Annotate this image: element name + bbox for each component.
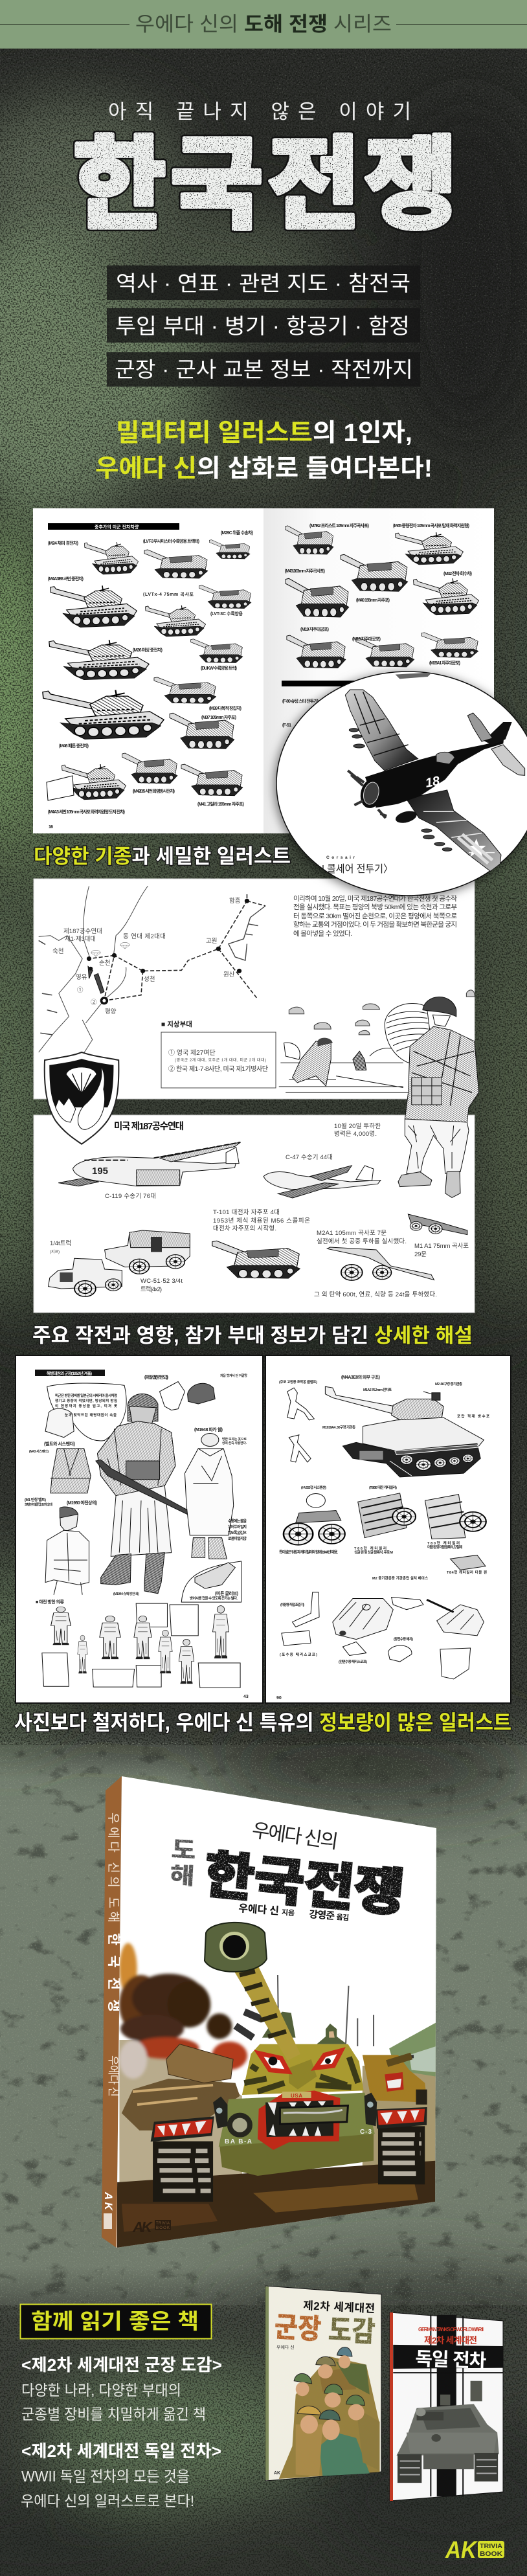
- tank page labels: (포수용 페리스코프): [280, 1652, 317, 1657]
- cover titles: 한국전쟁: [201, 1846, 407, 1922]
- left page vehicle drawings: 중추가의 미군 전차차량: [95, 524, 139, 530]
- right page labels: (M19 자주대공포): [300, 626, 329, 632]
- tank page labels: [276, 1374, 489, 1700]
- left page labels: (M26 퍼싱 중전차): [133, 647, 163, 653]
- main title: 한국전쟁: [73, 129, 458, 242]
- vehicle and gun labels: C-119 수송기 76대: [105, 1193, 156, 1200]
- magnifier: Corsair fighter: [276, 672, 527, 896]
- left page labels: (M29C 위즐 수송차): [221, 530, 253, 536]
- small clothing figures: [51, 1606, 229, 1684]
- right page labels: (M16 자주대공포): [352, 636, 381, 642]
- uniform page labels: 방어시를 접을 수 있도록 끈기는 벌다.: [190, 1596, 238, 1601]
- map parachute icons: [91, 942, 129, 956]
- tank page labels: (전면수용 페리스코프): [339, 1659, 367, 1664]
- spine: 한국전쟁: [106, 1933, 121, 2012]
- operation description text: 전을 실시했다. 목표는 평양의 북방 50km에 있는 숙천과 그로부: [293, 903, 457, 911]
- fin and tailplanes: [484, 722, 512, 745]
- distant tank: [363, 2055, 427, 2103]
- tank page labels: T66형 캐터필러: [354, 1546, 387, 1551]
- headline: [95, 420, 432, 482]
- book 1 title text: [273, 2299, 376, 2476]
- right page labels: (M15A1 자주대공포): [429, 660, 460, 666]
- recommended books heading: [21, 2304, 211, 2339]
- tank page labels: M2 .50구경 중기관총: [435, 1381, 462, 1386]
- torso: [405, 1026, 479, 1122]
- iron cross bands: [393, 2314, 503, 2496]
- book 2 title text: [415, 2327, 487, 2372]
- panel: operation units, lower part: [34, 1115, 475, 1313]
- uniform page labels: 이 현장까지 동상을 입고, 미처 못: [55, 1403, 117, 1408]
- operation description text: 터 동쪽으로 30km 떨어진 순천으로, 이곳은 평양에서 북쪽으로: [293, 912, 457, 920]
- map place labels: ①: [77, 987, 84, 994]
- vehicle and gun labels: 1/4t트럭: [50, 1239, 71, 1247]
- headlights: [213, 2096, 227, 2129]
- Corsair caption: [317, 855, 393, 875]
- map: [39, 886, 265, 1053]
- section bar: 해병대원의 군장(1950년 겨울): [47, 1370, 92, 1376]
- vehicle and gun labels: M1 A1 75mm 곡사포: [414, 1243, 469, 1250]
- howitzers: [327, 1214, 467, 1280]
- tank page labels: 더블 핀 및 더블 블록식, 강철제: [427, 1544, 462, 1550]
- uniform page labels: (M43 서스펜더): [29, 1449, 49, 1454]
- icon: 187th regiment shield: [45, 1052, 118, 1144]
- helmet and face: [423, 997, 456, 1026]
- right page vehicle drawings: [282, 526, 478, 686]
- main title: 한국전쟁: [73, 129, 458, 242]
- drop tank: [396, 811, 417, 823]
- right page labels: (M7B2 프리스트 105mm 자주곡사포): [309, 523, 369, 528]
- book 2 title text: 제2차 세계대전: [424, 2335, 477, 2345]
- left page labels: (M46 패튼 중전차): [59, 743, 89, 749]
- uniform page labels: 넣어 두어 얼지: [228, 1524, 247, 1530]
- parachute bundle: [385, 1003, 432, 1063]
- cover titles: 도: [171, 1837, 197, 1864]
- recommended book descriptions: <제2차 세계대전 독일 전차>: [21, 2441, 221, 2461]
- upper hull: [219, 2093, 375, 2147]
- suspension bogie: [284, 1494, 345, 1545]
- hull markings: [225, 2093, 372, 2145]
- logo: AK Trivia Book: TRIVIA: [480, 2542, 502, 2550]
- book: WWII German tanks: [390, 2312, 503, 2501]
- propeller blur: [348, 771, 387, 818]
- left page labels: [48, 530, 253, 830]
- operation description text: 에 몰아넣을 수 있었다.: [293, 930, 352, 938]
- tank page labels: 포탑 적재 방수포: [457, 1414, 489, 1419]
- logo: AK Trivia Book: BOOK: [480, 2550, 502, 2558]
- bow plate: [280, 2106, 348, 2124]
- spine: 우에다 신: [107, 2055, 119, 2097]
- hull markings: C-3: [360, 2129, 372, 2136]
- cover publisher logo: AK: [132, 2219, 153, 2235]
- fuselage: [365, 740, 504, 808]
- tank page labels: M1A2 76.2mm 전차포: [363, 1387, 392, 1392]
- ground forces box: ② 한국 제1·7·8사단, 미국 제1기병사단: [168, 1065, 268, 1073]
- vehicle and gun labels: T-101 대전차 자주포 4대: [213, 1208, 280, 1216]
- uniform page labels: [25, 1373, 249, 1699]
- paratrooper figure: [385, 997, 479, 1197]
- tracks: [153, 2141, 213, 2202]
- ground forces box: [161, 1020, 276, 1088]
- right page labels: (F-51: [282, 723, 291, 728]
- tank page labels: (T80E 대전 캐터필러): [369, 1485, 397, 1490]
- map place labels: 함흥: [229, 897, 241, 905]
- left page labels: (M4A3E8 셔먼 중전차): [48, 576, 84, 582]
- map place labels: 평양: [105, 1008, 117, 1015]
- uniform page labels: 상의 신축 사용한다.: [222, 1441, 247, 1445]
- cover publisher logo: TRIVIA: [156, 2222, 170, 2226]
- tank page labels: (차장용 직접 조준기): [280, 1602, 304, 1607]
- logo: AK Trivia Book: [445, 2536, 504, 2563]
- cover titles: 우에다 신 지음: [238, 1903, 295, 1918]
- gun mantlet: [289, 2059, 317, 2090]
- uniform page labels: (M1948 파카 쉘): [194, 1427, 223, 1432]
- mitten glove: [181, 1561, 241, 1602]
- ground forces box: (영국군 2개 대대, 호주군 1개 대대, 미군 2개 대대): [175, 1057, 266, 1063]
- ground forces box: ① 영국 제27여단: [168, 1049, 216, 1057]
- C-47 aircraft: [264, 1166, 381, 1198]
- cowling: [360, 781, 376, 808]
- map place labels: [52, 897, 241, 1015]
- map place labels: 제1·제3대대: [65, 936, 96, 943]
- trucks: [49, 1230, 190, 1296]
- book mockup: [102, 1776, 436, 2255]
- hull markings: BA B-A: [225, 2138, 252, 2145]
- operation description text: 향하는 교통의 거점이었다. 이 두 거점을 확보하면 북한군을 궁지: [293, 920, 457, 929]
- spine: AK: [102, 2191, 115, 2211]
- Corsair caption: Corsair: [326, 855, 355, 860]
- Tiger tank: [396, 2404, 499, 2456]
- recommended books heading: 함께 읽기 좋은 책: [31, 2309, 199, 2333]
- vehicle and gun labels: 그 외 탄약 600t, 연료, 식량 등 24t을 투하했다.: [314, 1291, 437, 1298]
- uniform page labels: (미튼 글러브): [215, 1590, 238, 1596]
- map place labels: 고원: [206, 938, 217, 945]
- vehicle and gun labels: (지프): [50, 1249, 60, 1254]
- upper wing: [345, 690, 418, 771]
- left page vehicle drawings: [43, 523, 251, 800]
- right page labels: (M43 203mm 자주곡사포): [285, 568, 325, 574]
- caption 2: 주요 작전과 영향, 참가 부대 정보가 담긴 상세한 해설: [32, 1324, 473, 1347]
- legs and boots: [398, 1119, 469, 1197]
- small parts: [282, 1592, 471, 1679]
- top series banner: [0, 0, 527, 49]
- tank page labels: (M4A3E8의 외부 구조): [341, 1374, 380, 1380]
- map place labels: 원산: [223, 971, 235, 978]
- vehicle and gun labels: 실전에서 첫 공중 투하를 실시했다.: [317, 1237, 407, 1245]
- recommended book descriptions: 다양한 나라, 다양한 부대의: [21, 2382, 181, 2399]
- left page labels: (LVTx-4 75mm 곡사포: [143, 591, 194, 597]
- fender teeth: [151, 2116, 214, 2141]
- recommended book descriptions: 우에다 신의 일러스트로 본다!: [21, 2492, 194, 2509]
- map place labels: 숙천: [52, 948, 63, 955]
- cover titles: 강영준 옮김: [309, 1909, 350, 1923]
- top series banner: 우에다 신의 도해 전쟁 시리즈: [135, 13, 392, 36]
- top stray details: [396, 672, 432, 679]
- cover publisher logo: BOOK: [156, 2226, 170, 2230]
- uniform page labels: (파일캡(방한모)): [144, 1374, 168, 1380]
- feature list boxes: [107, 266, 420, 387]
- speech bubble: [47, 1383, 126, 1441]
- left page labels: (M39 다목적 장갑차): [209, 705, 241, 711]
- recommended book descriptions: 군종별 장비를 치밀하게 옮긴 책: [21, 2406, 206, 2423]
- uniform page labels: (M1 탄창 벨트): [25, 1497, 46, 1502]
- right page labels: (F-80 슈팅 스타 전투기): [282, 698, 319, 704]
- turret: [242, 2044, 364, 2095]
- hull markings: USA: [291, 2093, 302, 2099]
- caption 1: 다양한 기종과 세밀한 일러스트: [34, 845, 291, 868]
- caption 3: 사진보다 철저하다, 우에다 신 특유의 정보량이 많은 일러스트: [14, 1711, 511, 1734]
- recommended book descriptions: [21, 2355, 222, 2509]
- uniform page labels: 챙기고 용량이 적었지만, 방상외피 방침: [55, 1398, 117, 1403]
- left page labels: (M42B5 셔먼 화염방사전차): [133, 788, 175, 794]
- hooded head: [45, 1408, 74, 1438]
- tools: [287, 1388, 314, 1462]
- soldiers group: [279, 2347, 379, 2479]
- vehicle and gun labels: 10월 20일 투하한: [334, 1122, 381, 1130]
- tank page labels: (장전수용 해치): [394, 1636, 413, 1642]
- vehicle and gun labels: WC-51·52 3/4t: [140, 1278, 183, 1285]
- book 1 title text: AK: [274, 2471, 280, 2476]
- M4A3E8 tank: [325, 1386, 484, 1477]
- operation description text: [293, 894, 457, 938]
- track and sprocket 1: [358, 1493, 416, 1538]
- small track link: [450, 1555, 486, 1570]
- ground: [117, 2161, 436, 2255]
- headline: 밀리터리 일러스트 의 1인자,: [116, 420, 412, 447]
- ground forces box: ■ 지상부대: [161, 1020, 192, 1028]
- left page labels: (LVT-3 부시마스터 수륙양용 트랙터): [143, 538, 199, 544]
- tank page labels: T84형 캐터필러 더블 핀: [447, 1570, 487, 1575]
- map place labels: ②: [91, 999, 97, 1006]
- left page labels: (M4A3 셔먼 105mm 곡사포 화력지원형 도저 전차): [48, 809, 125, 815]
- tank page labels: 특이설은 워킹과 캐터필러와 함께 1944년 채용.: [279, 1550, 338, 1555]
- book 2 title text: GERMAN TANKS OF WORLD WAR II: [418, 2327, 484, 2333]
- right page labels: [282, 523, 472, 728]
- logo: AK Trivia Book: AK: [445, 2536, 478, 2563]
- panel: uniform illustration page: [16, 1355, 263, 1703]
- spine: [102, 1776, 122, 2248]
- left page labels: (M37 105mm 자주포): [201, 714, 236, 720]
- section bar: [35, 1370, 105, 1376]
- main marine figure: [96, 1394, 207, 1594]
- book 1 title text: 우에다 신: [276, 2344, 295, 2350]
- uniform page labels: 처음 벗겨서 던 겨갈망: [220, 1373, 247, 1378]
- rockets: [349, 729, 452, 851]
- cover painting: [117, 1943, 436, 2255]
- cover titles: 해: [169, 1863, 195, 1890]
- map place labels: 동 연대 제2대대: [123, 933, 166, 940]
- C-119 number: 195: [92, 1166, 108, 1177]
- C-119 aircraft: [58, 1142, 240, 1186]
- uniform page labels: 방한 모자는 옷으로: [222, 1437, 247, 1441]
- right page labels: (M40 155mm 자주포): [356, 597, 390, 603]
- recommended book descriptions: <제2차 세계대전 군장 도감>: [21, 2355, 222, 2375]
- map place labels: 영유: [76, 974, 87, 981]
- cover titles: 우에다 신의: [251, 1820, 339, 1853]
- left page labels: (DUKW 수륙양용 트럭): [201, 665, 237, 671]
- vehicle and gun labels: [50, 1122, 469, 1298]
- right page labels: (M32 전차 회수차): [443, 571, 472, 576]
- track and sprocket 2: [425, 1495, 486, 1539]
- aircraft number: 18: [424, 774, 442, 791]
- book 1 title text: 제2차 세계대전: [303, 2299, 376, 2315]
- uniform page labels: 수통에는 물을: [228, 1519, 247, 1524]
- dusty ground: [119, 2040, 242, 2191]
- M1950 field jacket figure: [45, 1507, 89, 1595]
- turret drawings: [333, 1598, 484, 1640]
- vehicle and gun labels: 대전차 자주포의 시작형.: [213, 1225, 276, 1232]
- front cover: [117, 1776, 436, 2248]
- feature list boxes: 역사 · 연표 · 관련 지도 · 참전국: [116, 271, 410, 295]
- tank page labels: (주포 고정용 조작봉 클램프): [279, 1379, 317, 1384]
- uniform page labels: 로 몸이 얼지 않: [228, 1536, 247, 1541]
- cover publisher logo: [132, 2219, 171, 2235]
- vehicle and gun labels: 트럭(4x2): [140, 1285, 162, 1293]
- book 1 title text: 군장 도감: [273, 2312, 376, 2348]
- tank page labels: 90: [276, 1696, 282, 1700]
- smoke and fire: [119, 1943, 247, 2079]
- map place labels: 성천: [144, 976, 155, 983]
- uniform page labels: (M1944 슈팩 방한 화): [113, 1592, 139, 1596]
- left page labels: 16: [49, 825, 53, 830]
- left page labels: (M24 채피 경전차): [48, 540, 78, 546]
- tank page labels: 싱글 핀 및 싱글 블록식, 주로 M: [354, 1550, 393, 1555]
- vehicle and gun labels: 1953년 제식 채용된 M56 스콜피온: [213, 1217, 310, 1225]
- spine: 우에다 신의 도해: [106, 1813, 120, 1923]
- tank gun barrel: [205, 1923, 300, 2061]
- uniform page labels: 눈과 맞닥뜨린 해병대원이 속출: [65, 1412, 117, 1418]
- recommended book descriptions: WWII 독일 전차의 모든 것을: [21, 2468, 190, 2485]
- cover titles: [169, 1820, 407, 1923]
- uniform page labels: (M1950 야전상의): [67, 1500, 97, 1506]
- map place labels: 제187공수연대: [63, 928, 102, 935]
- uniform page labels: 미군은 방한 장비를 일본군의 시베리아 출시처럼: [55, 1393, 117, 1398]
- tank page labels: T80형 캐터필러: [427, 1541, 460, 1546]
- winter caps: [160, 1382, 215, 1410]
- left page labels: (LVT-3C 수륙양용: [210, 611, 243, 616]
- book: WWII uniforms guide: [265, 2286, 381, 2481]
- vehicle and gun labels: 29문: [414, 1251, 427, 1258]
- tank page labels: M1919A4 .30구경 기관총: [322, 1425, 355, 1430]
- vehicle and gun labels: 병력은 4,000명.: [334, 1130, 377, 1138]
- panel: vehicle illustration spread: [33, 508, 494, 833]
- vehicle and gun labels: C-47 수송기 44대: [286, 1154, 333, 1161]
- lower hull: [219, 2132, 374, 2176]
- tank page labels: (HVSS형 서스펜션): [301, 1485, 326, 1490]
- right page labels: (M45 중형전차 105mm 곡사포 탑재 화력지원형): [393, 523, 469, 528]
- panel: tank structure illustration page: [265, 1355, 511, 1703]
- panel: operation map and units, upper part: [34, 879, 475, 1099]
- uniform page labels: ■ 야전 방한 의류: [36, 1599, 65, 1605]
- paratroop landing scene: [279, 990, 475, 1092]
- feature list boxes: 군장 · 군사 교본 정보 · 작전까지: [115, 357, 413, 381]
- star insignia: [467, 839, 486, 857]
- map place labels: 순천: [99, 960, 110, 967]
- left page labels: (M41 고릴라 155mm 자주포): [197, 801, 244, 807]
- wrecked tank: [122, 2079, 240, 2130]
- tank page labels: M2 중기관총용 기관총탑 설치 베이스: [372, 1576, 428, 1581]
- Corsair caption: U 콜세어 전투기〉: [317, 863, 393, 875]
- vehicle and gun labels: M2A1 105mm 곡사포 7문: [317, 1230, 387, 1237]
- headline: 우에다 신의 삽화로 들여다본다!: [95, 455, 432, 482]
- uniform page labels: (벨트와 서스펜더): [44, 1441, 75, 1447]
- unit name: 미국 제187공수연대: [114, 1121, 184, 1132]
- suspenders: [50, 1449, 91, 1493]
- M1948 parka shell figure: [185, 1434, 234, 1559]
- lower wing: [406, 790, 501, 872]
- eyes: [259, 2053, 288, 2072]
- T-101 self-propelled gun: [212, 1241, 300, 1278]
- uniform page labels: 43: [243, 1695, 249, 1699]
- soldiers: [317, 2024, 347, 2044]
- book 2 title text: 독일 전차: [415, 2348, 487, 2372]
- feature list boxes: 투입 부대 · 병기 · 항공기 · 함정: [115, 314, 410, 338]
- explanation bubbles: [42, 1603, 240, 1688]
- uniform page labels: 30발 탄띠(클립) 12개 휴대: [25, 1502, 52, 1507]
- shark mouth: [258, 2090, 340, 2150]
- hero subtitle: 아직 끝나지 않은 이야기: [108, 100, 411, 123]
- operation description text: 이리하여 10월 20일, 미국 제187공수연대가 한국전쟁 첫 공수작: [293, 894, 457, 903]
- uniform page labels: 않도록, 입김으: [228, 1530, 247, 1535]
